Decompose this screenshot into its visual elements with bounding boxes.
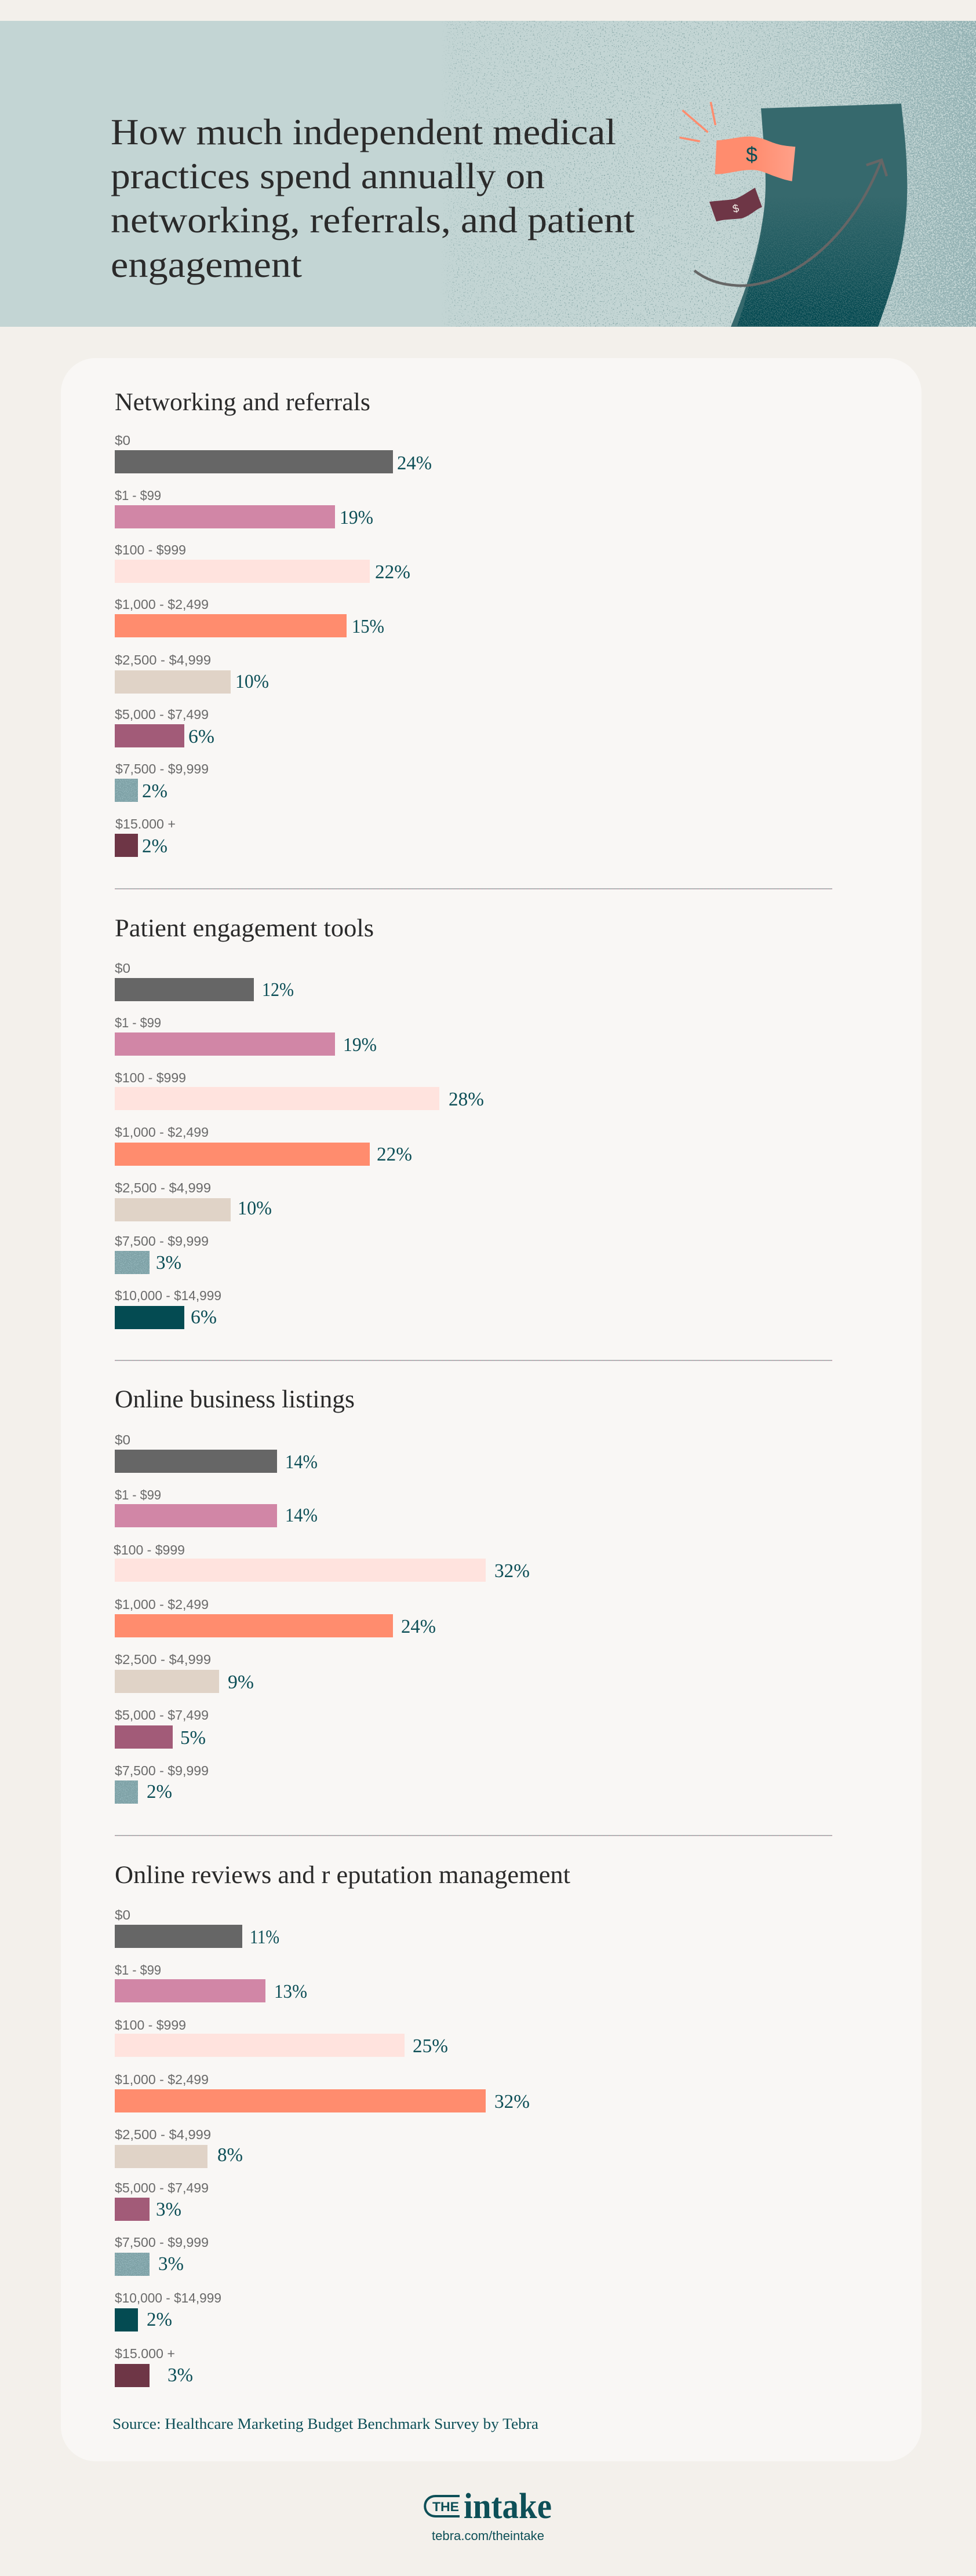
card background xyxy=(61,358,922,2461)
bar: $100-$999 25% xyxy=(115,2017,448,2057)
footer logo: The Intake xyxy=(425,2487,552,2526)
heading: Networking and referrals xyxy=(115,389,370,416)
icon: orange dollar bill: $ xyxy=(746,143,758,166)
bar: $2,500-$4,999 8%: 8% xyxy=(217,2144,243,2166)
title: networking, referrals, and patient xyxy=(111,199,635,240)
bar: $15,000+ 2%: 2% xyxy=(142,835,167,857)
bar: $5,000-$7,499 3%: 3% xyxy=(156,2199,181,2220)
bar: $7,500-$9,999 2%: $7,500 - $9,999 xyxy=(115,1763,209,1778)
bar: $10,000-$14,999 6%: $10,000 - $14,999 xyxy=(115,1288,221,1303)
bar: $15,000+ 3%: $15.000 + xyxy=(115,2346,175,2361)
illustration: rising money xyxy=(679,102,916,327)
bar: $100-$999 28% xyxy=(115,1070,484,1110)
bar: $1-$99 19%: 19% xyxy=(343,1034,377,1056)
bar: $1,000-$2,499 15%: 15% xyxy=(352,616,384,637)
title xyxy=(111,111,635,285)
bar: $5,000-$7,499 6%: 6% xyxy=(188,726,214,747)
title: engagement xyxy=(111,244,302,285)
bar: $100-$999 32%: 32% xyxy=(494,1560,530,1582)
bar: $100-$999 22%: 22% xyxy=(375,561,410,583)
bar: $1,000-$2,499 22%: $1,000 - $2,499 xyxy=(115,1125,209,1140)
dark curved shape xyxy=(731,104,907,327)
bar: $0 11%: $0 xyxy=(115,1907,130,1922)
bar: $1,000-$2,499 22% xyxy=(115,1125,412,1166)
bar: $2,500-$4,999 10% xyxy=(115,652,269,694)
bar: $2,500-$4,999 8% xyxy=(115,2127,243,2168)
footer url: tebra.com/theintake xyxy=(432,2528,544,2543)
bar: $15,000+ 3% xyxy=(115,2346,193,2387)
bar: $5,000-$7,499 3% xyxy=(115,2180,209,2221)
bar: $7,500-$9,999 3%: 3% xyxy=(156,1252,181,1274)
bar: $0 12%: $0 xyxy=(115,961,130,976)
bar: $2,500-$4,999 10% xyxy=(115,1180,272,1221)
bar: $7,500-$9,999 2%: $7,500 - $9,999 xyxy=(115,761,209,776)
bar: $0 14% xyxy=(115,1432,318,1473)
bar: $1,000-$2,499 22%: 22% xyxy=(377,1144,412,1165)
banner grain texture xyxy=(440,21,976,327)
bar: $7,500-$9,999 3%: 3% xyxy=(158,2253,184,2275)
section: Online business listings xyxy=(114,1386,530,1804)
bar: $0 12%: 12% xyxy=(262,979,294,1001)
bar: $100-$999 28%: $100 - $999 xyxy=(115,1070,186,1085)
bar: $2,500-$4,999 10%: 10% xyxy=(235,671,269,692)
bar: $2,500-$4,999 9%: $2,500 - $4,999 xyxy=(115,1652,211,1667)
bar: $100-$999 32% xyxy=(114,1542,530,1582)
bar: $1,000-$2,499 24%: 24% xyxy=(401,1616,436,1637)
bar: $7,500-$9,999 2% xyxy=(115,761,209,802)
logo pill outline xyxy=(425,2496,460,2516)
bar: $7,500-$9,999 3%: $7,500 - $9,999 xyxy=(115,1234,209,1249)
bar: $0 14%: 14% xyxy=(285,1451,318,1473)
bar: $1-$99 19% xyxy=(115,1015,377,1056)
bar: $10,000-$14,999 6% xyxy=(115,1288,221,1329)
heading: Online business listings xyxy=(115,1386,355,1413)
bar: $15,000+ 2% xyxy=(115,816,176,857)
bar: $0 24%: $0 xyxy=(115,433,130,448)
bar: $1,000-$2,499 15% xyxy=(115,597,384,637)
bar: $1,000-$2,499 32%: 32% xyxy=(494,2091,530,2112)
bar: $7,500-$9,999 2%: 2% xyxy=(147,1781,172,1803)
icon: maroon dollar bill: $ xyxy=(731,202,741,216)
bar: $10,000-$14,999 2%: $10,000 - $14,999 xyxy=(115,2290,221,2305)
bar: $2,500-$4,999 9%: 9% xyxy=(228,1672,254,1693)
bar: $1-$99 19%: 19% xyxy=(340,507,373,528)
bar: $5,000-$7,499 6% xyxy=(115,707,214,747)
bar: $100-$999 25%: $100 - $999 xyxy=(115,2017,186,2033)
bar: $1-$99 14%: $1 - $99 xyxy=(115,1487,161,1502)
bar: $5,000-$7,499 6%: $5,000 - $7,499 xyxy=(115,707,209,722)
bar: $7,500-$9,999 3% xyxy=(115,1234,209,1274)
bar: $1-$99 13%: $1 - $99 xyxy=(115,1962,161,1977)
bar: $1,000-$2,499 32%: $1,000 - $2,499 xyxy=(115,2072,209,2087)
bar: $2,500-$4,999 10%: $2,500 - $4,999 xyxy=(115,1180,211,1195)
bar: $100-$999 28%: 28% xyxy=(449,1089,484,1110)
logo word intake: intake xyxy=(464,2487,552,2526)
logo word THE: THE xyxy=(432,2500,459,2514)
bar: $0 24%: 24% xyxy=(397,453,432,474)
source note: Source: Healthcare Marketing Budget Benchmark Survey by Tebra xyxy=(112,2416,538,2432)
bar: $100-$999 25%: 25% xyxy=(413,2035,448,2057)
section: Networking and referrals xyxy=(115,389,432,857)
bar: $15,000+ 2%: $15.000 + xyxy=(115,816,176,831)
bar: $1,000-$2,499 24% xyxy=(115,1597,436,1637)
section: Patient engagement tools xyxy=(115,915,484,1329)
bar: $1,000-$2,499 15%: $1,000 - $2,499 xyxy=(115,597,209,612)
bar: $10,000-$14,999 6%: 6% xyxy=(191,1307,217,1328)
bar: $10,000-$14,999 2%: 2% xyxy=(147,2309,172,2330)
bar: $100-$999 22% xyxy=(115,542,410,583)
bar: $1,000-$2,499 32% xyxy=(115,2072,530,2112)
bar: $15,000+ 3%: 3% xyxy=(167,2365,193,2386)
bar: $7,500-$9,999 3%: $7,500 - $9,999 xyxy=(115,2235,209,2250)
banner background xyxy=(0,21,976,327)
header banner xyxy=(0,21,976,327)
bar: $10,000-$14,999 2% xyxy=(115,2290,221,2331)
bar: $1-$99 14% xyxy=(115,1487,318,1527)
bar: $0 24% xyxy=(115,433,432,474)
icon: spark rays xyxy=(679,102,715,141)
bar: $5,000-$7,499 5%: 5% xyxy=(180,1727,206,1749)
heading: Online reviews and r eputation management xyxy=(115,1862,570,1889)
title: How much independent medical xyxy=(111,111,616,152)
bar: $1-$99 14%: 14% xyxy=(285,1505,318,1526)
bar: $0 14%: $0 xyxy=(115,1432,130,1447)
bar: $2,500-$4,999 10%: $2,500 - $4,999 xyxy=(115,652,211,667)
bar: $7,500-$9,999 2% xyxy=(115,1763,209,1804)
bar: $0 11% xyxy=(115,1907,279,1948)
arrow: upward curve xyxy=(694,160,887,286)
icon: orange dollar bill xyxy=(715,137,795,181)
bar: $2,500-$4,999 9% xyxy=(115,1652,254,1693)
heading: Patient engagement tools xyxy=(115,915,374,942)
title: practices spend annually on xyxy=(111,155,545,196)
bar: $1-$99 19%: $1 - $99 xyxy=(115,488,161,503)
bar: $1-$99 19% xyxy=(115,488,373,528)
icon: maroon dollar bill xyxy=(709,188,762,221)
bar: $1-$99 19%: $1 - $99 xyxy=(115,1015,161,1030)
panel: results card xyxy=(61,358,922,2461)
bar: $7,500-$9,999 3% xyxy=(115,2235,209,2276)
bar: $5,000-$7,499 3%: $5,000 - $7,499 xyxy=(115,2180,209,2195)
bar: $100-$999 22%: $100 - $999 xyxy=(115,542,186,557)
bar: $1-$99 13%: 13% xyxy=(274,1981,307,2002)
bar: $5,000-$7,499 5%: $5,000 - $7,499 xyxy=(115,1707,209,1723)
bar: $7,500-$9,999 2%: 2% xyxy=(142,780,167,802)
bar: $100-$999 32%: $100 - $999 xyxy=(114,1542,185,1557)
bar: $1,000-$2,499 24%: $1,000 - $2,499 xyxy=(115,1597,209,1612)
bar: $5,000-$7,499 5% xyxy=(115,1707,209,1749)
bar: $0 12% xyxy=(115,961,294,1001)
section: Online reviews and reputation management xyxy=(115,1862,570,2387)
bar: $1-$99 13% xyxy=(115,1962,307,2002)
bar: $2,500-$4,999 8%: $2,500 - $4,999 xyxy=(115,2127,211,2142)
bar: $0 11%: 11% xyxy=(250,1926,279,1948)
bar: $2,500-$4,999 10%: 10% xyxy=(238,1198,272,1219)
